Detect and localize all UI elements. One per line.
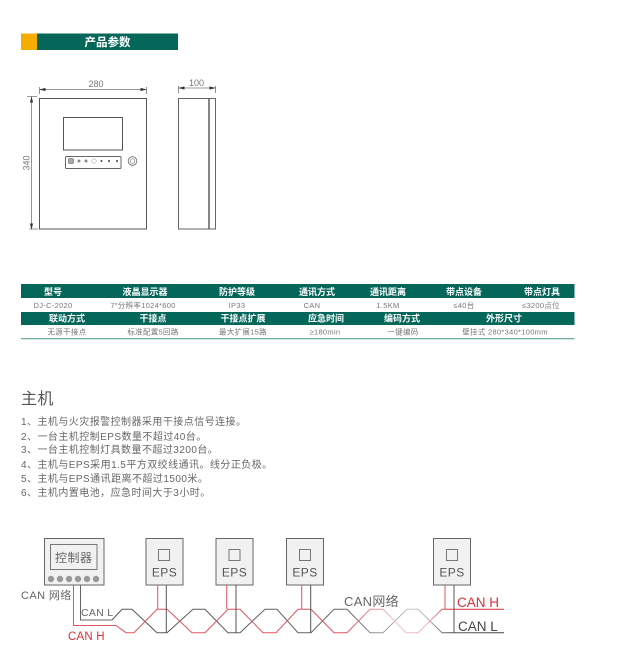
table row 2 values: 最大扩展15路	[219, 326, 267, 336]
table row 1 values: ≤3200点位	[522, 300, 560, 310]
EPS unit 2: EPS	[222, 566, 247, 580]
key switch	[128, 157, 137, 165]
table row 1 header	[44, 286, 560, 297]
table row 1 header: 型号	[44, 286, 62, 297]
table row 1 values: ≤40台	[453, 300, 475, 310]
table row 1 values: 7″分辨率1024*600	[110, 300, 176, 310]
description list: 5、主机与EPS通讯距离不超过1500米。	[21, 472, 208, 485]
label: CAN H right: CAN H	[457, 595, 499, 610]
table row 2 header: 应急时间	[308, 312, 344, 324]
description list: 2、一台主机控制EPS数量不超过40台。	[21, 430, 207, 443]
label: CAN L right: CAN L	[458, 619, 498, 634]
front view drawing	[22, 79, 146, 229]
control strip	[66, 156, 121, 168]
EPS unit 3	[286, 538, 324, 585]
label: CAN network centre: CAN网络	[344, 594, 399, 609]
description list: 3、一台主机控制灯具数量不超过3200台。	[21, 443, 218, 456]
dimension: height 340	[22, 96, 38, 229]
description list: 4、主机与EPS采用1.5平方双绞线通讯。线分正负极。	[21, 458, 273, 471]
label: CAN H left: CAN H	[68, 631, 105, 643]
side view drawing	[178, 78, 216, 229]
table row 2 header: 联动方式	[49, 312, 85, 324]
table row 2 values: 标准配置5回路	[127, 326, 179, 336]
description list: 1、主机与火灾报警控制器采用干接点信号连接。	[21, 415, 246, 428]
table row 2 header: 外形尺寸	[486, 312, 522, 324]
EPS unit 1	[146, 538, 183, 585]
description list: 6、主机内置电池，应急时间大于3小时。	[21, 486, 211, 499]
table row 2 header: 干接点	[139, 312, 167, 324]
heading: product parameters: 产品参数	[84, 35, 131, 49]
EPS unit 4	[434, 538, 470, 585]
table row 2 header: 编码方式	[384, 312, 420, 324]
EPS unit 3: EPS	[292, 566, 318, 580]
section title: 主机	[21, 390, 54, 408]
table row 1 values: DJ-C-2020	[34, 301, 72, 310]
table row 2 values: ≥180min	[310, 328, 340, 336]
twisted pair CAN L	[112, 609, 504, 633]
table row 1 header: 带点灯具	[524, 286, 560, 297]
label: CAN network left: CAN 网络	[21, 588, 72, 602]
table row 2 header	[49, 312, 522, 324]
wiring diagram	[21, 538, 504, 643]
dimension: width 280: 280	[88, 79, 104, 89]
table row 2 header: 干接点扩展	[220, 312, 266, 324]
dimension: depth 100	[178, 78, 216, 93]
EPS unit 4: EPS	[439, 566, 465, 580]
dimension: height 340: 340	[22, 155, 32, 171]
cabinet body	[40, 98, 146, 229]
table row 2 values: 壁挂式 280*340*100mm	[462, 326, 548, 336]
parameter table	[21, 284, 574, 339]
label: CAN L left: CAN L	[81, 607, 113, 619]
EPS unit 2	[216, 538, 253, 585]
controller wires	[74, 585, 116, 626]
table row 1 header: 液晶显示器	[122, 286, 168, 297]
dimension: width 280	[40, 79, 146, 94]
table row 1 values	[34, 300, 560, 310]
table row 1 values: IP33	[229, 301, 245, 310]
twisted pair CAN H	[116, 609, 504, 633]
description list	[21, 415, 273, 499]
table row 1 values: CAN	[304, 301, 320, 310]
table row 1 header: 通讯距离	[370, 286, 406, 297]
controller unit: 控制器	[55, 551, 92, 565]
heading: product parameters	[21, 34, 178, 50]
table row 2 values: 无源干接点	[48, 326, 87, 336]
cabinet side	[178, 98, 216, 229]
EPS drop wires	[158, 585, 454, 633]
table row 1 header: 防护等级	[219, 286, 255, 297]
LCD screen	[64, 118, 122, 150]
table row 1 header: 带点设备	[446, 286, 482, 297]
controller unit	[44, 538, 104, 585]
table row 1 header: 通讯方式	[299, 286, 335, 297]
table row 1 values: 1.5KM	[376, 301, 400, 310]
table row 2 values	[48, 326, 548, 336]
table row 2 values: 一键编码	[387, 326, 419, 336]
dimension: depth 100: 100	[189, 78, 204, 88]
EPS unit 1: EPS	[152, 566, 177, 580]
